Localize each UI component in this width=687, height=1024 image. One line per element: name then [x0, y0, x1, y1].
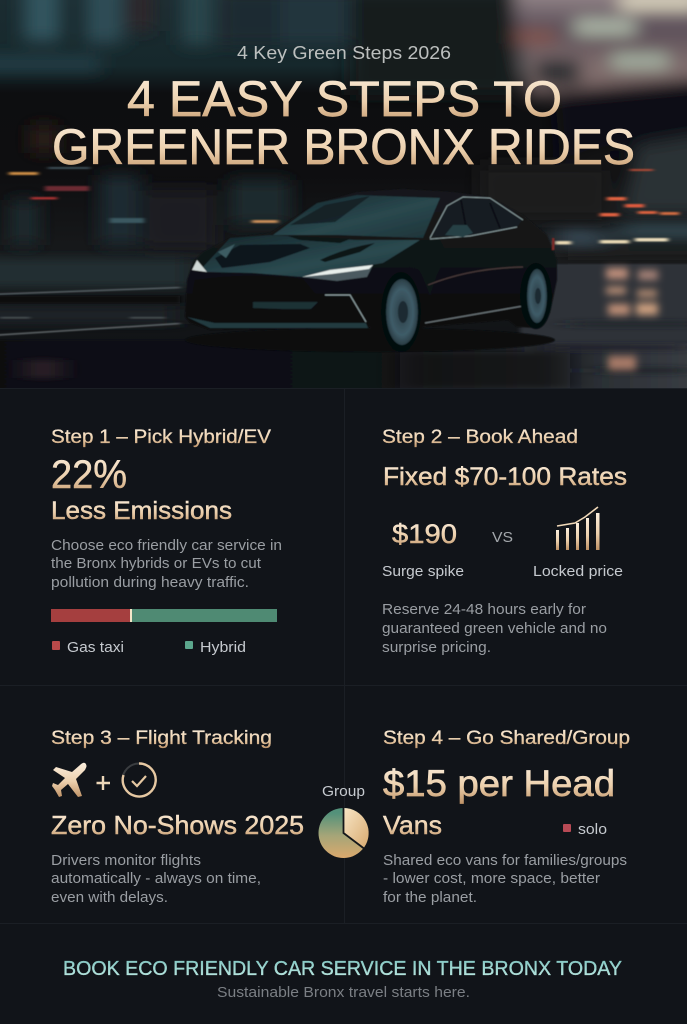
text: step 4 description: Shared eco vans for families/groups: [383, 852, 627, 869]
pie chart: group vs solo: [318, 783, 369, 858]
hero photo: car on wet street: [0, 0, 687, 400]
text: step 1 description: Choose eco friendly car service in: [51, 537, 282, 554]
icon: airplane: [52, 763, 86, 797]
legend: solo: solo: [578, 821, 607, 838]
text: step 1 description: pollution during heavy traffic.: [51, 574, 249, 591]
comparison: surge spike: Surge spike: [382, 563, 464, 580]
wet road: [0, 264, 687, 400]
panel: step 4: [383, 728, 630, 906]
stat: zero no-shows: Zero No-Shows 2025: [51, 810, 304, 840]
text: step 2 description: [382, 601, 607, 656]
stat: $15 per head: $15 per Head: [383, 763, 615, 804]
label: locked price: Locked price: [533, 563, 623, 580]
text: step 3 description: even with delays.: [51, 889, 168, 906]
heading: step 2: Step 2 – Book Ahead: [382, 427, 578, 448]
icon: plus: [96, 776, 110, 790]
text: step 4 description: [383, 852, 627, 906]
text: step 3 description: [51, 852, 261, 906]
heading: step 3: Step 3 – Flight Tracking: [51, 728, 272, 749]
car: [185, 189, 557, 352]
comparison: surge spike: [382, 519, 464, 580]
call to action footer: [63, 958, 622, 1001]
cta subline: Sustainable Bronx travel starts here.: [217, 984, 470, 1001]
pie chart: group vs solo: Group: [322, 783, 365, 800]
legend: hybrid: Hybrid: [200, 639, 246, 656]
panel: step 3: [51, 728, 304, 906]
text: step 2 description: Reserve 24-48 hours early for: [382, 601, 586, 618]
eyebrow: 4 Key Green Steps 2026: [237, 43, 451, 63]
panel grid lines: [0, 388, 687, 924]
heading: step 4: Step 4 – Go Shared/Group: [383, 728, 630, 749]
text: step 2 description: guaranteed green vehicle and no: [382, 620, 607, 637]
subheading: vans: Vans: [383, 810, 442, 840]
text: step 3 description: automatically - always on time,: [51, 870, 261, 887]
panel: step 1: [51, 427, 282, 656]
title: [52, 71, 635, 175]
icon: rising bars: [556, 507, 600, 550]
legend: solo: [563, 821, 607, 838]
icon: check circle: [122, 763, 156, 796]
subheading: less emissions: Less Emissions: [51, 497, 232, 525]
bar chart: gas taxi vs hybrid: [51, 609, 277, 622]
legend: gas taxi: Gas taxi: [67, 639, 124, 656]
label: vs: VS: [492, 529, 513, 546]
text: step 2 description: surprise pricing.: [382, 639, 491, 656]
cta headline: BOOK ECO FRIENDLY CAR SERVICE IN THE BRONX TODAY: [63, 958, 622, 980]
title: 4 EASY STEPS TO: [127, 71, 562, 127]
comparison: surge spike: $190: [392, 519, 457, 549]
title: GREENER BRONX RIDES: [52, 119, 635, 175]
text: step 1 description: the Bronx hybrids or EVs to cut: [51, 555, 262, 572]
stat: fixed rates: Fixed $70-100 Rates: [383, 463, 627, 491]
text: step 3 description: Drivers monitor flights: [51, 852, 201, 869]
stat: 22%: 22%: [51, 453, 127, 497]
panel: step 2: [382, 427, 627, 656]
heading: step 1: Step 1 – Pick Hybrid/EV: [51, 427, 271, 448]
text: step 1 description: [51, 537, 282, 591]
text: step 4 description: - lower cost, more space, better: [383, 870, 600, 887]
text: step 4 description: for the planet.: [383, 889, 477, 906]
